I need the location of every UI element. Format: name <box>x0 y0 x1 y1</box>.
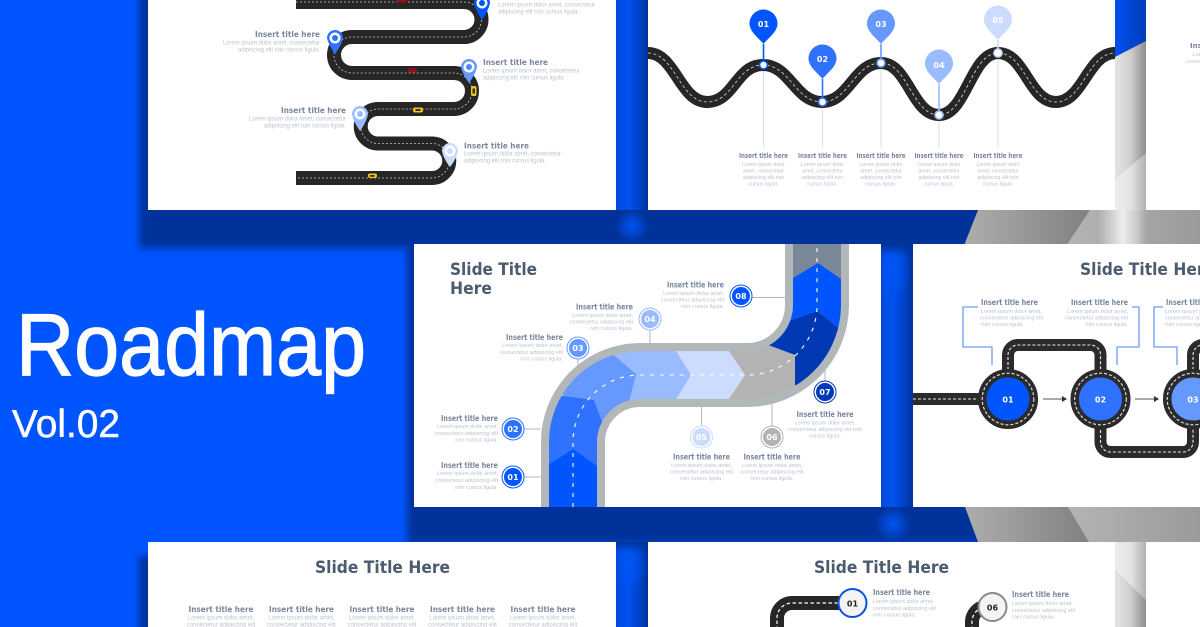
arrow 1 <box>1043 396 1067 402</box>
node 01 <box>982 373 1034 425</box>
pin 01 <box>750 10 778 69</box>
road centre dashes <box>573 244 817 507</box>
hero subtitle: Vol.02: Vol.02 <box>12 403 120 446</box>
pin 02 <box>808 45 836 106</box>
node 02: 02 <box>1095 396 1106 404</box>
column labels: Insert title here <box>350 605 415 614</box>
wavy labels: amet, consectetur <box>860 168 902 174</box>
panel: circle road slide <box>913 244 1200 507</box>
label 4: adipiscing elit roin cursus ligula. <box>264 124 346 130</box>
node 02 <box>1075 373 1126 425</box>
bracket 1 <box>963 307 992 365</box>
label 08: consectetur adipiscing elit <box>661 298 724 304</box>
label 04: Lorem ipsum dolor amet, <box>572 313 633 319</box>
badge 02: 02 <box>507 425 519 434</box>
label 07: cursus ligula. <box>809 434 842 440</box>
circle road network <box>913 345 1200 452</box>
badge 06: 06 <box>766 433 778 442</box>
label 2 <box>1065 298 1128 328</box>
label 05: Lorem ipsum dolor amet, <box>671 463 732 469</box>
heading: Here <box>450 279 492 299</box>
label 02: roin cursus ligula. <box>455 438 498 444</box>
wavy labels: adipiscing elit roin <box>918 175 960 181</box>
label 5: Insert title here <box>464 142 530 150</box>
pin 03 <box>867 10 895 67</box>
wavy labels: Insert title here <box>798 152 847 160</box>
label 07: Insert title here <box>796 410 854 419</box>
panel: main arrow road slide <box>414 230 881 520</box>
label 02: consectetur adipiscing elit <box>435 431 498 437</box>
label 3: Lorem ipsum dolor amet, consectetur <box>483 68 580 74</box>
label 01 <box>873 588 936 618</box>
label 07 <box>788 410 862 440</box>
label 5: Lorem ipsum dolor amet, consectetur <box>464 152 561 158</box>
wavy labels: adipiscing elit roin <box>977 175 1019 181</box>
label 01: Insert title here <box>441 461 498 470</box>
badge 05 <box>690 426 712 448</box>
column labels: Lorem ipsum dolor amet, <box>349 616 416 622</box>
label 01 <box>435 461 498 491</box>
heading: Slide Title <box>450 260 537 280</box>
road casing <box>573 230 817 520</box>
panel: wavy road slide <box>648 0 1115 210</box>
wavy road <box>648 53 1115 115</box>
road arrow segments <box>549 244 841 507</box>
label 06: Insert title here <box>744 452 801 462</box>
wavy labels: cursus ligula. <box>748 182 779 188</box>
badge 07: 07 <box>819 388 831 397</box>
wavy labels: Insert title here <box>856 152 906 160</box>
label 3 <box>483 58 580 82</box>
wavy labels: cursus ligula. <box>866 182 896 188</box>
connector lines <box>524 298 825 477</box>
wavy labels: amet, consectetur <box>743 168 784 174</box>
wavy labels: Insert title here <box>739 152 788 160</box>
label 01: consectetur adipiscing elit <box>435 478 498 484</box>
wavy labels: amet, consectetur <box>977 168 1019 174</box>
grey drop lines <box>764 53 998 147</box>
label 01: Lorem ipsum dolor amet, <box>437 471 498 477</box>
pin 3 <box>461 59 477 83</box>
column labels <box>187 605 578 627</box>
wavy labels: amet, consectetur <box>802 168 843 174</box>
pin 04 <box>925 50 953 119</box>
label top <box>498 2 595 16</box>
label 1: consectetur adipiscing elit <box>980 316 1043 322</box>
label 3: adipiscing elit roin cursus ligula. <box>483 76 565 82</box>
badge 01: 01 <box>507 473 519 482</box>
hero title: Roadmap: Roadmap <box>16 295 366 394</box>
badge 07 <box>814 381 836 403</box>
label 06: consectetur adipiscing elit <box>741 470 804 476</box>
label 4 <box>249 106 347 130</box>
node 01: 01 <box>847 600 858 608</box>
pin 01: 01 <box>758 20 769 29</box>
label 2: Insert title here <box>255 30 321 39</box>
badge 03 <box>567 337 589 359</box>
label 01: Lorem ipsum dolor amet, <box>873 599 934 605</box>
label 01: roin cursus ligula. <box>455 485 498 491</box>
node 06 <box>978 593 1006 621</box>
panel: partial slide top right: conse <box>1186 59 1200 65</box>
label 2: Lorem ipsum dolor amet, consectetur <box>223 40 320 46</box>
winding road <box>296 2 482 178</box>
wavy labels: adipiscing elit roin <box>743 175 784 181</box>
label 1: Lorem ipsum dolor amet, <box>981 309 1042 315</box>
label 03: roin cursus ligula. <box>520 356 563 362</box>
label 04 <box>570 302 633 332</box>
label 2 <box>223 30 321 54</box>
road fragments <box>777 603 985 627</box>
node 06: 06 <box>987 604 998 612</box>
badge 03: 03 <box>572 344 584 353</box>
label 01: consectetur adipiscing elit <box>873 606 936 612</box>
badge 05: 05 <box>696 433 707 442</box>
label 05: consectetur adipiscing elit <box>670 470 733 476</box>
label 2: Insert title here <box>1071 298 1128 307</box>
heading: Slide Title Here <box>315 558 450 578</box>
label 07: consectetur adipiscing elit roin <box>788 427 862 433</box>
arrow 2 <box>1135 396 1159 402</box>
pin 2 <box>327 30 343 54</box>
label 4: Lorem ipsum dolor amet, consectetur <box>249 116 346 122</box>
badge 04: 04 <box>644 315 656 324</box>
wavy labels: cursus ligula. <box>807 182 838 188</box>
wavy labels: Lorem ipsum dolor <box>918 162 961 168</box>
label 3: Insert title here <box>483 58 549 67</box>
wavy labels: Lorem ipsum dolor <box>742 162 785 168</box>
pin 04: 04 <box>933 61 945 70</box>
label 05 <box>670 452 733 482</box>
label 02: Lorem ipsum dolor amet, <box>437 424 498 430</box>
label 06: roin cursus ligula. <box>1012 614 1055 620</box>
badge 04 <box>639 308 661 330</box>
panel: bottom left slide <box>148 542 616 627</box>
wavy labels: Lorem ipsum dolor <box>860 162 903 168</box>
column labels: Lorem ipsum dolor amet, <box>188 616 255 622</box>
pin 05: 05 <box>992 16 1004 25</box>
wavy labels: cursus ligula. <box>924 182 954 188</box>
label 04: roin cursus ligula. <box>590 326 633 332</box>
panel: partial slide bottom right <box>1146 542 1200 627</box>
wavy labels: adipiscing elit roin <box>802 175 843 181</box>
wavy labels: Insert title here <box>974 152 1023 160</box>
badge 01 <box>502 466 524 488</box>
label 05: roin cursus ligula. <box>680 476 723 482</box>
label top: Lorem ipsum dolor amet, consectetur <box>498 2 595 8</box>
node 03: 03 <box>1187 396 1199 404</box>
bracket 2 <box>1117 307 1139 365</box>
label 08: roin cursus ligula. <box>681 304 724 310</box>
panel: winding road slide <box>148 0 616 210</box>
label 05: Insert title here <box>673 452 730 462</box>
label 2: Lorem ipsum dolor amet, <box>1067 309 1128 315</box>
label 07: Lorem ipsum dolor amet, <box>795 420 856 426</box>
wavy labels: Lorem ipsum dolor <box>977 162 1020 168</box>
label 06: Lorem ipsum dolor amet, <box>742 463 803 469</box>
label top: adipiscing elit roin cursus ligula. <box>498 10 579 16</box>
badge 06 <box>761 426 783 448</box>
label 03 <box>500 333 563 362</box>
heading: Slide Title Here <box>814 558 949 578</box>
heading <box>451 262 536 294</box>
label 01: roin cursus ligula. <box>873 612 916 618</box>
label 06: consectetur adipiscing elit <box>1012 608 1075 614</box>
column labels: Lorem ipsum dolor amet, <box>510 616 577 622</box>
badge 08 <box>730 285 752 307</box>
label 04: Insert title here <box>576 302 633 312</box>
pin 5 <box>442 143 458 167</box>
node 03 <box>1167 373 1200 425</box>
wavy labels: cursus ligula. <box>983 182 1013 188</box>
label 04: consectetur adipiscing elit <box>570 320 633 326</box>
column labels: Insert title here <box>269 605 335 614</box>
node 01: 01 <box>1002 396 1014 404</box>
column labels: Lorem ipsum dolor amet, <box>268 616 335 622</box>
label 1: roin cursus ligula. <box>981 322 1024 328</box>
wavy labels: Lorem ipsum dolor <box>801 162 844 168</box>
label 08: Lorem ipsum dolor amet, <box>663 291 724 297</box>
pin 03: 03 <box>875 20 887 29</box>
column labels: Insert title here <box>430 605 496 614</box>
label 4: Insert title here <box>281 106 347 115</box>
label 3 <box>1165 298 1200 328</box>
panel: partial slide top right <box>1146 0 1200 210</box>
pin 05 <box>984 6 1012 57</box>
pin 1 <box>474 0 490 20</box>
badge 08: 08 <box>735 292 747 301</box>
column labels: Lorem ipsum dolor amet, <box>429 616 496 622</box>
label 06 <box>1012 590 1075 620</box>
label 1: Insert title here <box>981 298 1038 307</box>
label 1 <box>980 298 1043 328</box>
wavy labels: Insert title here <box>914 152 964 160</box>
label 2: roin cursus ligula. <box>1085 322 1128 328</box>
panel: bottom middle slide <box>648 542 1115 627</box>
label 01: Insert title here <box>873 588 930 597</box>
label 08 <box>661 280 724 310</box>
label 02 <box>435 414 498 444</box>
label 2: adipiscing elit roin cursus ligula. <box>238 48 320 54</box>
cars <box>368 0 476 178</box>
label 06: Insert title here <box>1012 590 1069 599</box>
label 03: Insert title here <box>506 333 563 342</box>
label 5 <box>464 142 561 164</box>
label 06: roin cursus ligula. <box>751 476 794 482</box>
bracket 3 <box>1154 307 1177 365</box>
wavy labels: adipiscing elit roin <box>860 175 902 181</box>
wavy labels: amet, consectetur <box>918 168 960 174</box>
label 2: consectetur adipiscing elit <box>1065 316 1128 322</box>
label 02: Insert title here <box>441 414 498 423</box>
badge 02 <box>502 418 524 440</box>
pin 02: 02 <box>817 55 828 64</box>
label 03: consectetur adipiscing elit <box>500 350 563 356</box>
column labels: Insert title here <box>188 605 254 614</box>
wavy labels <box>739 152 1023 188</box>
label 08: Insert title here <box>667 280 724 290</box>
node 01 <box>838 589 866 617</box>
label 06 <box>741 452 804 482</box>
label 5: adipiscing elit roin cursus ligula. <box>464 158 546 164</box>
pin 4 <box>352 106 368 131</box>
column labels: Insert title here <box>510 605 576 614</box>
label 06: Lorem ipsum dolor amet, <box>1012 601 1073 607</box>
label 03: Lorem ipsum dolor amet, <box>502 343 563 349</box>
